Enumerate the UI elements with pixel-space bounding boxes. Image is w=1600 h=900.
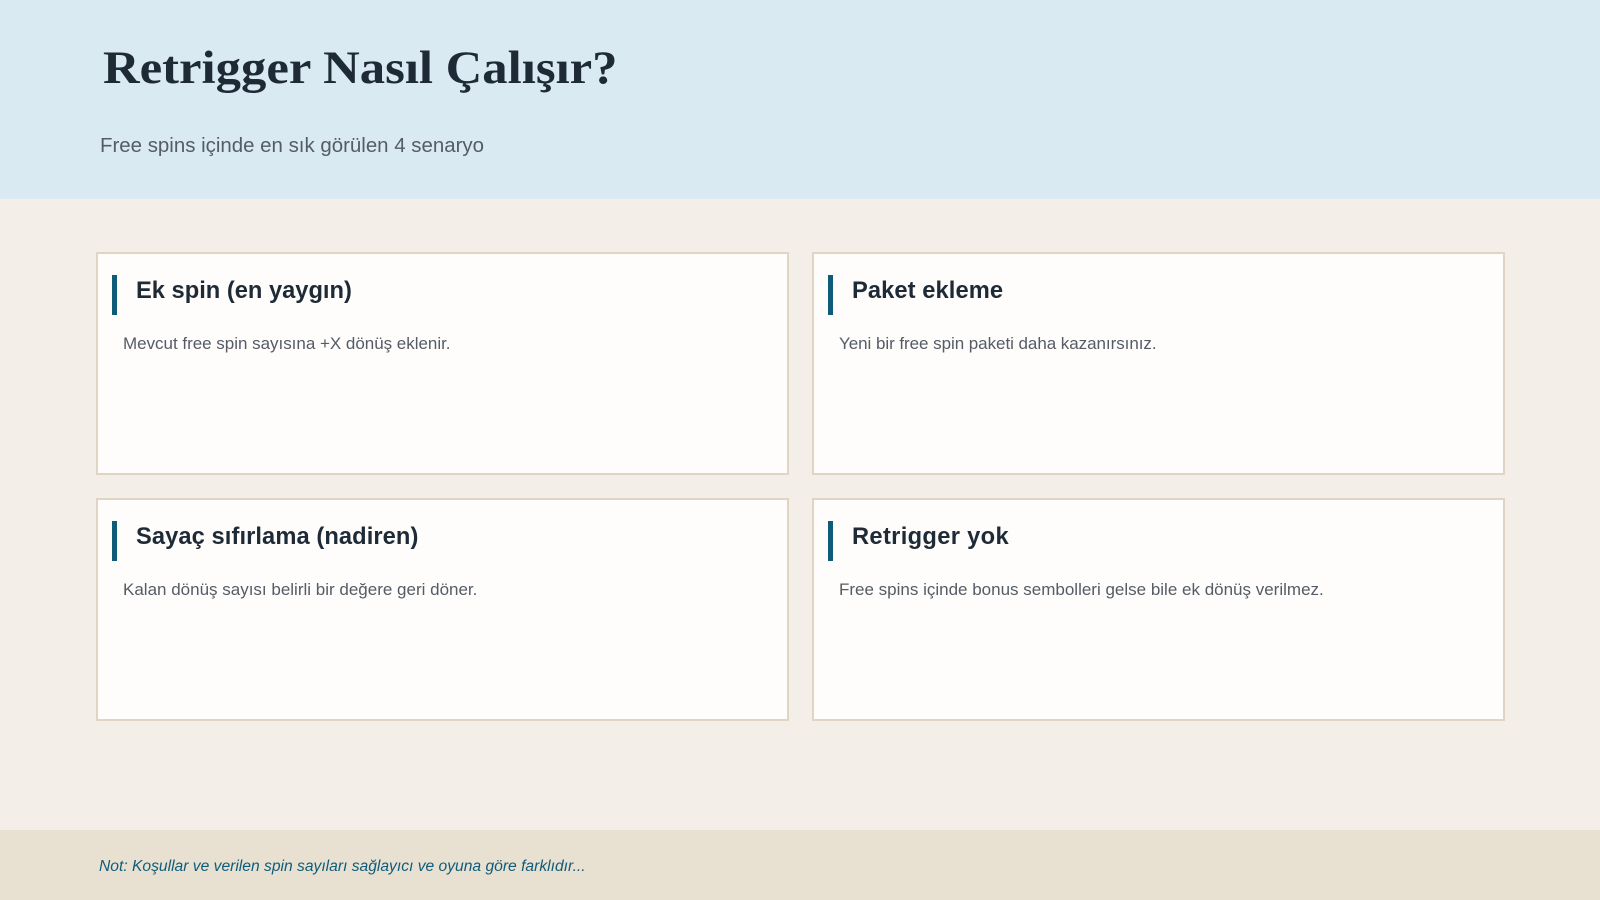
card text: Yeni bir free spin paketi daha kazanırsınız.	[839, 334, 1157, 353]
footer band	[0, 830, 1600, 900]
panel: Ek spin	[96, 252, 789, 475]
panel: Paket ekleme	[812, 252, 1505, 475]
title: Retrigger Nasıl Çalışır?	[103, 42, 618, 94]
panel: Sayaç sıfırlama	[96, 498, 789, 721]
accent bar	[112, 275, 117, 315]
footnote: Not: Koşullar ve verilen spin sayıları sağlayıcı ve oyuna göre farklıdır...	[99, 858, 586, 875]
accent bar	[112, 521, 117, 561]
card heading: Retrigger yok	[852, 524, 1009, 550]
card text: Mevcut free spin sayısına +X dönüş eklenir.	[123, 334, 451, 353]
card text: Kalan dönüş sayısı belirli bir değere geri döner.	[123, 580, 477, 599]
panel: Retrigger yok	[812, 498, 1505, 721]
accent bar	[828, 521, 833, 561]
card heading: Sayaç sıfırlama (nadiren)	[136, 524, 418, 550]
card text: Free spins içinde bonus sembolleri gelse bile ek dönüş verilmez.	[839, 580, 1324, 599]
card heading: Paket ekleme	[852, 278, 1003, 304]
card heading: Ek spin (en yaygın)	[136, 278, 352, 304]
subtitle: Free spins içinde en sık görülen 4 senaryo	[100, 134, 484, 157]
header band	[0, 0, 1600, 199]
accent bar	[828, 275, 833, 315]
